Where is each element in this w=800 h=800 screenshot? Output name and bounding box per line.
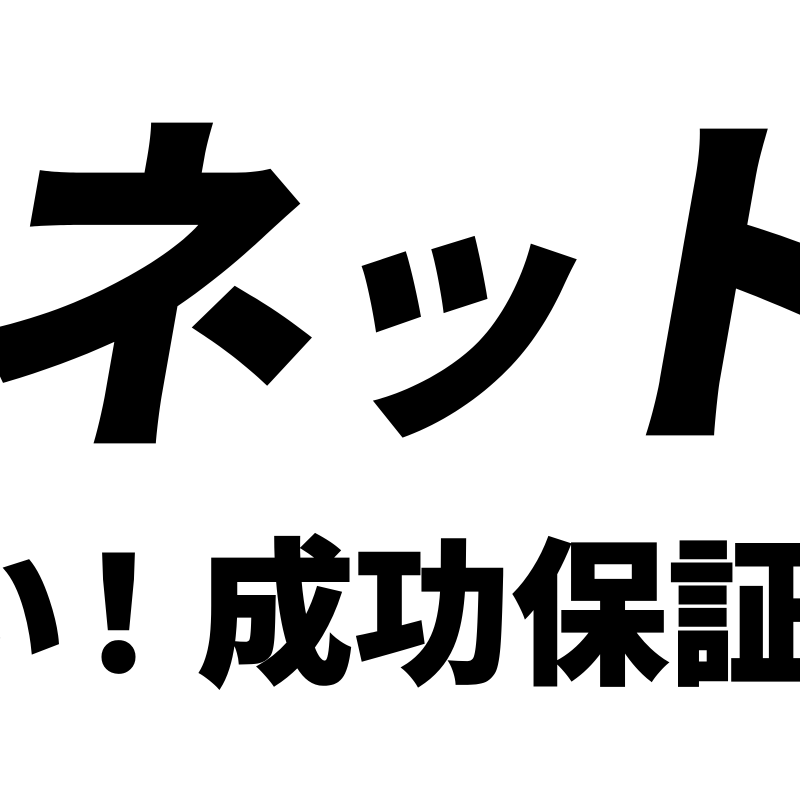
heading: large italic katakana xyxy=(0,92,800,497)
subheading: success guarantee text xyxy=(0,530,800,705)
heading glyph: small tsu: ッ xyxy=(286,151,627,469)
